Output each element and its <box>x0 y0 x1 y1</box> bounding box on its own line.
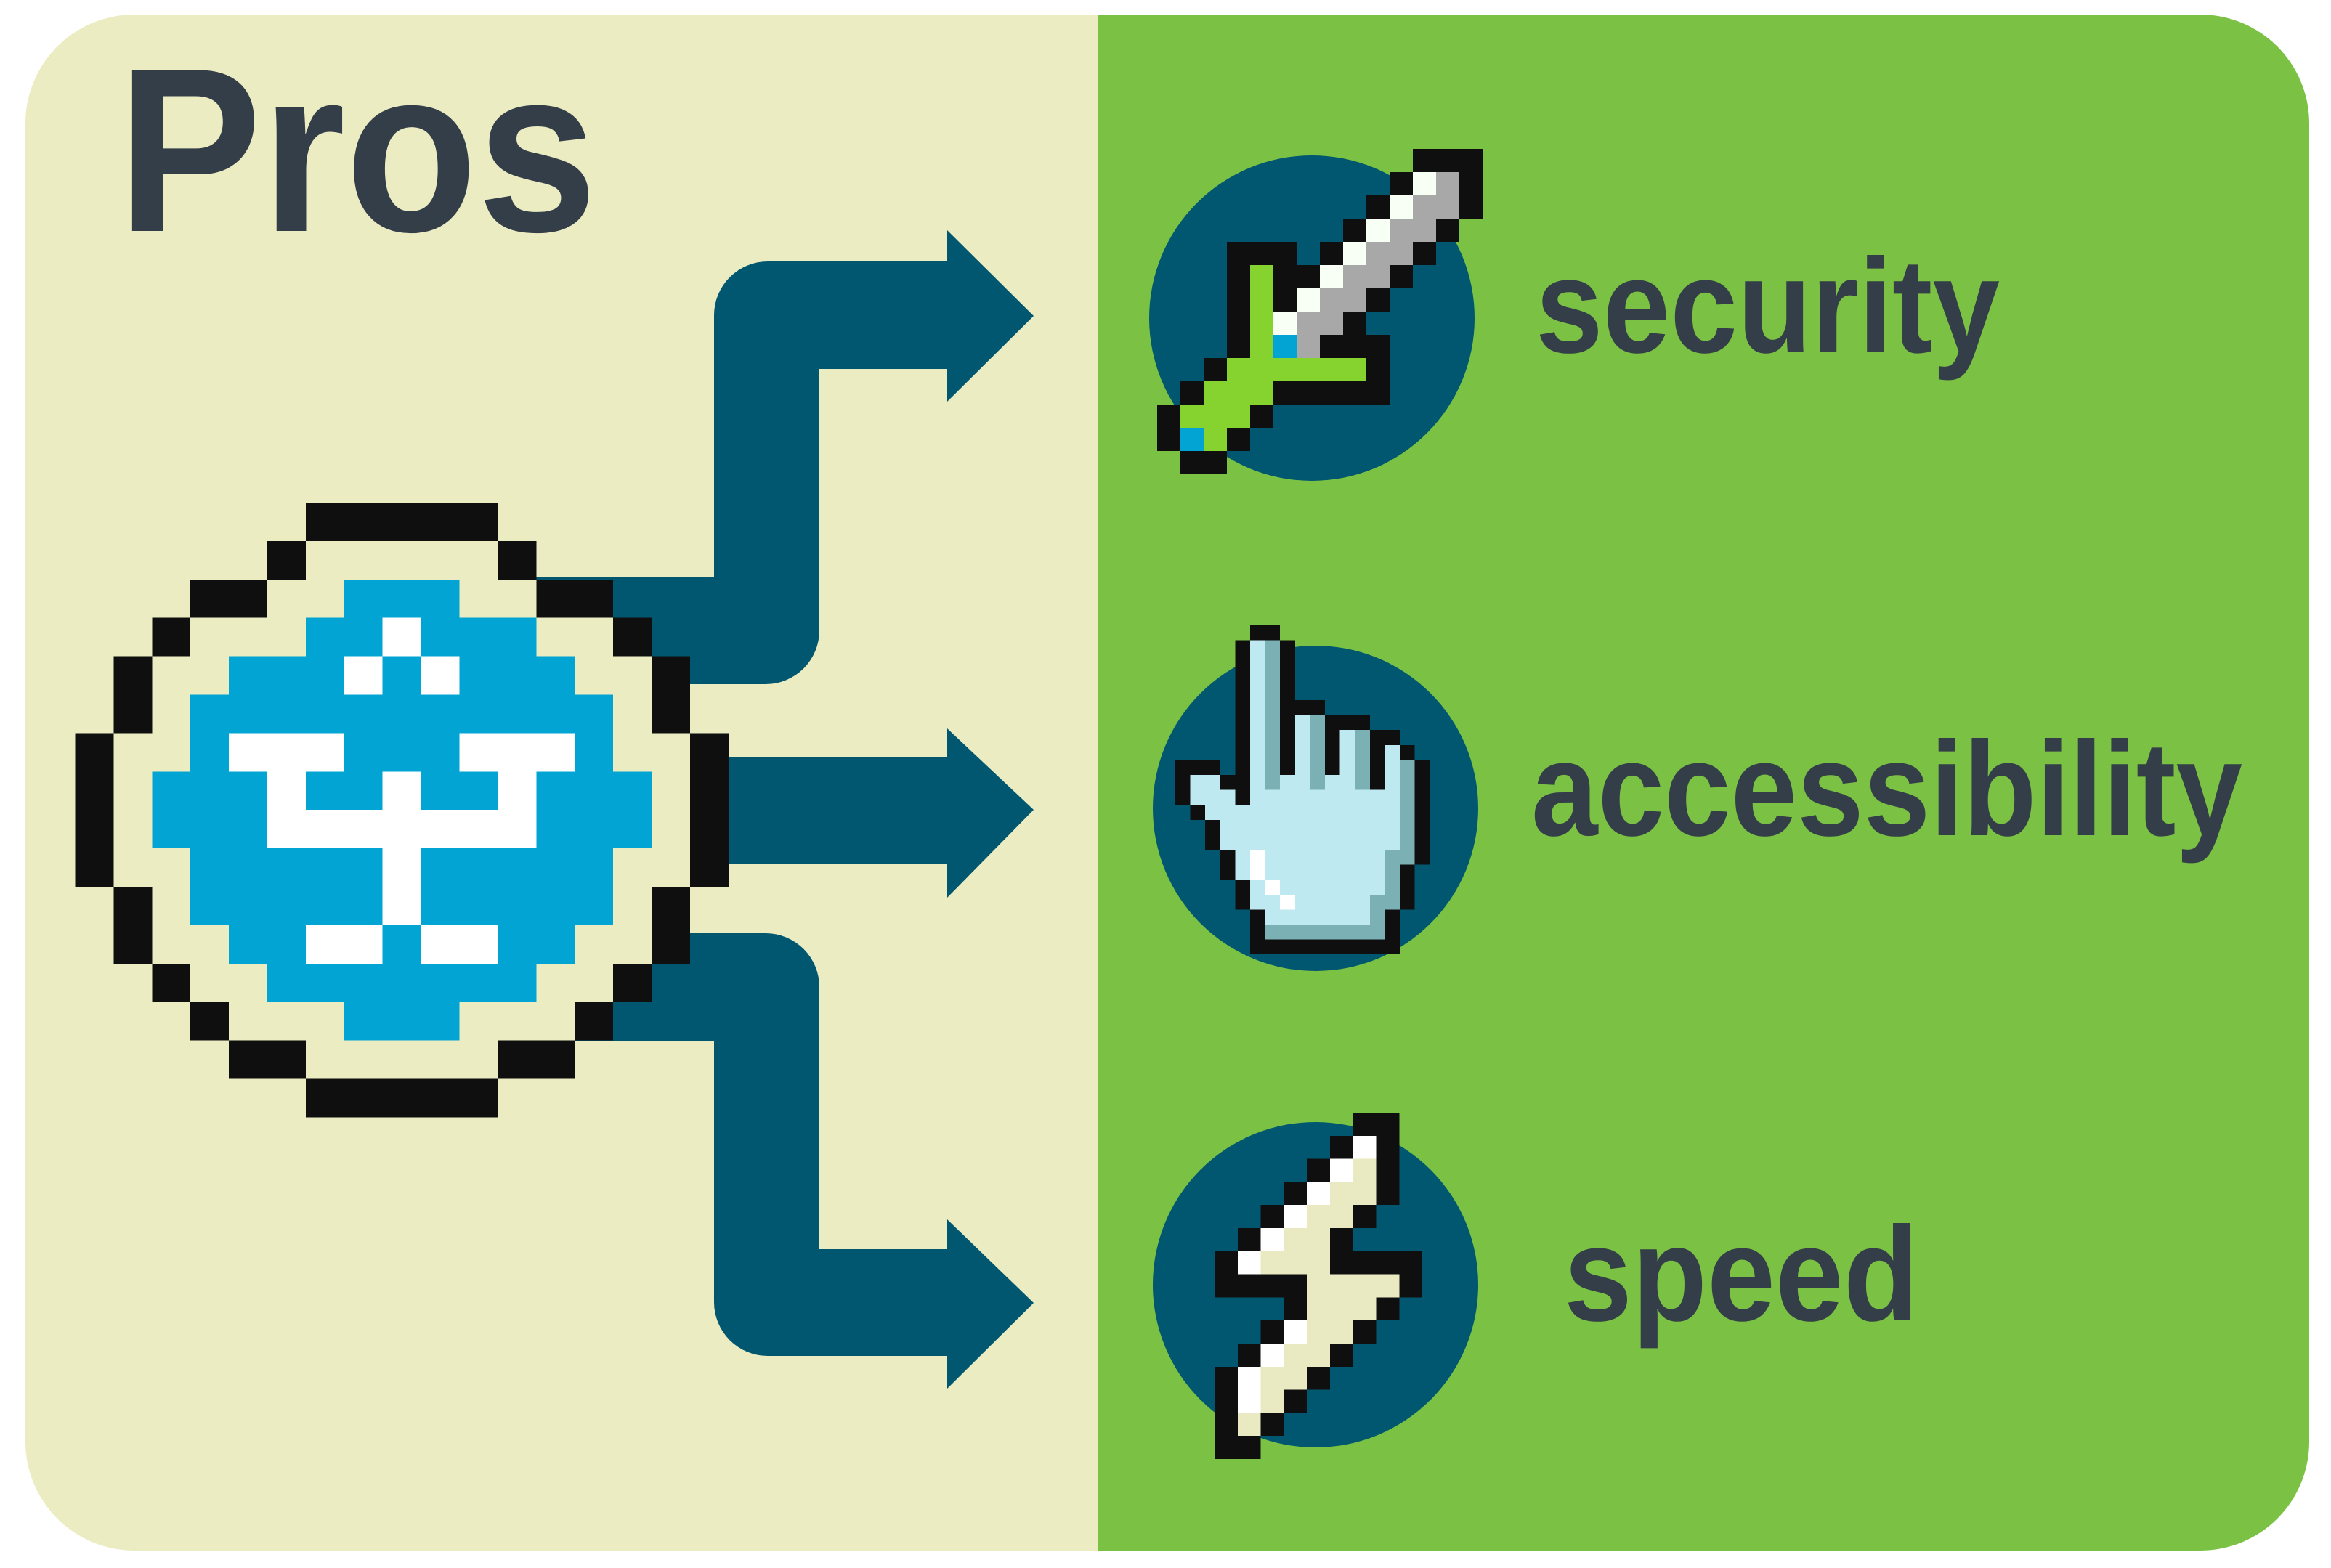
title: Pros <box>118 20 597 281</box>
label: accessibility: accessibility <box>1531 715 2242 864</box>
label: security: security <box>1536 232 2000 381</box>
label: speed: speed <box>1564 1200 1918 1349</box>
icon: hand cursor circle <box>1153 625 1478 971</box>
arrow: top to security <box>535 230 1034 684</box>
arrow: middle to accessibility <box>654 728 1034 898</box>
icon: pixel globe <box>76 503 729 1117</box>
icon: sword circle <box>1149 149 1483 481</box>
icon: lightning bolt circle <box>1153 1113 1478 1459</box>
arrow: bottom to speed <box>535 933 1034 1389</box>
